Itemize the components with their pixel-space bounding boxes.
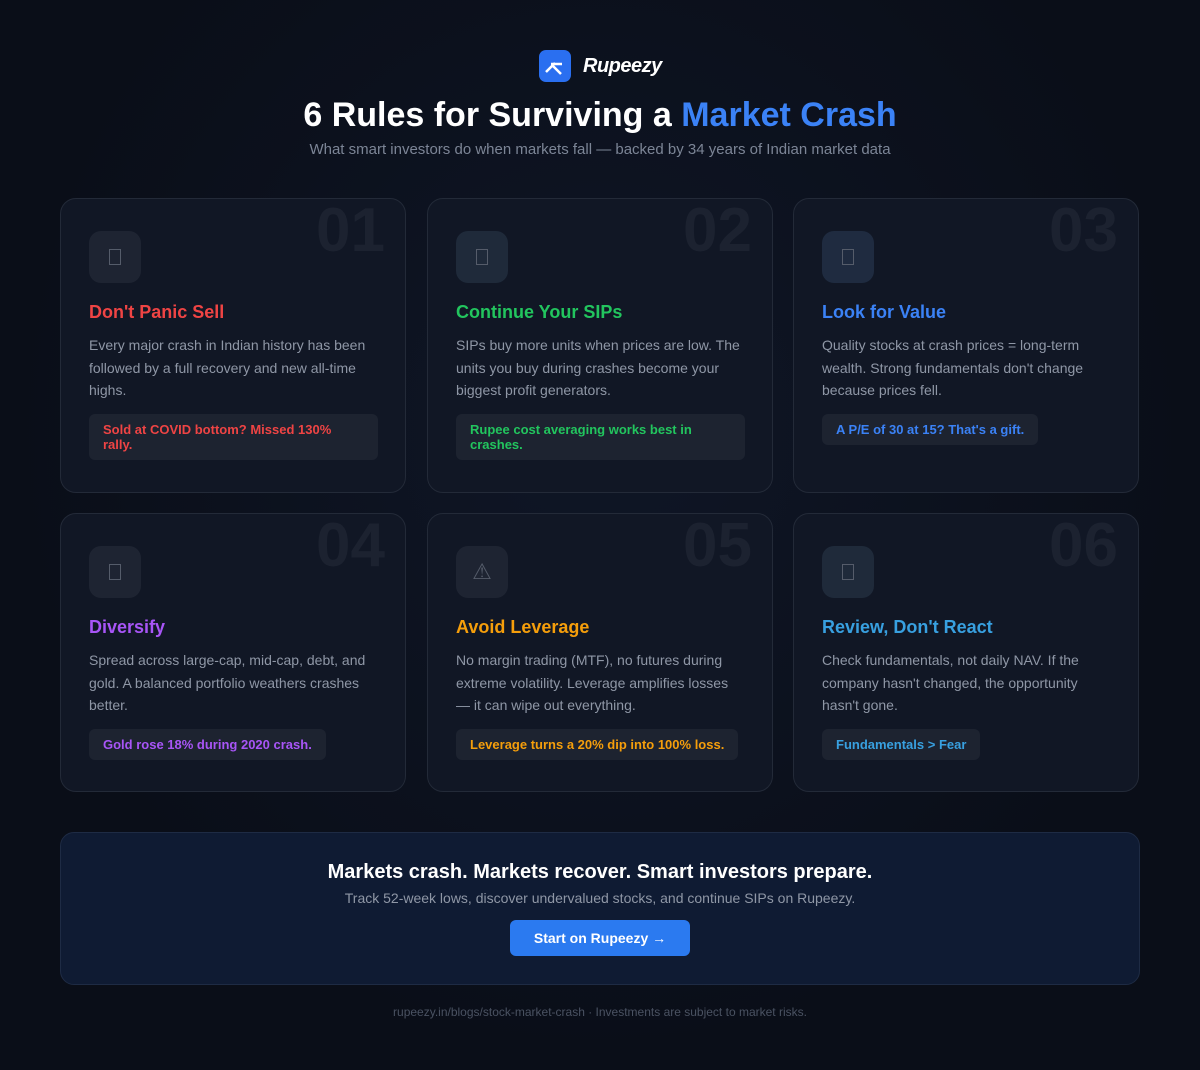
- panel: rule 04: Diversify: [89, 617, 165, 637]
- icon: 02: [456, 231, 508, 283]
- title: 6 Rules for Surviving a Market Crash: [303, 96, 897, 134]
- panel: rule 01: Don't Panic Sell: [89, 302, 224, 322]
- button: Start on Rupeezy →: [534, 930, 666, 946]
- panel: rule 02: 02: [683, 196, 752, 265]
- icon: 01: [89, 231, 141, 283]
- panel: rule 06: 06: [1049, 511, 1118, 580]
- logo: Rupeezy: [583, 54, 662, 76]
- icon: warning: ⚠: [472, 559, 492, 584]
- panel: rule 03: [793, 198, 1139, 493]
- icon: 06: [822, 546, 874, 598]
- panel: rule 04: 04: [316, 511, 385, 580]
- panel: rule 02: [427, 198, 773, 493]
- panel: rule 05: [427, 513, 773, 792]
- panel: rule 05: Avoid Leverage: [456, 617, 589, 637]
- panel: rule 06: Review, Don't React: [822, 617, 993, 637]
- panel: rule 05: Leverage turns a 20% dip into 100% loss.: [470, 736, 724, 752]
- panel: rule 02: Rupee cost averaging works best in crashes.: [470, 422, 692, 452]
- panel: rule 04: Spread across large-cap, mid-cap, debt, and gold. A balanced portfolio weathers crashes better.: [89, 652, 365, 713]
- icon: warning: [456, 546, 508, 598]
- panel: rule 06: [793, 513, 1139, 792]
- panel: rule 03: 03: [1049, 196, 1118, 265]
- panel: rule 05: No margin trading (MTF), no futures during extreme volatility. Leverage amplifies losses — it can wipe out everything.: [456, 652, 728, 713]
- subtitle: What smart investors do when markets fall — backed by 34 years of Indian market data: [309, 141, 891, 158]
- panel: rule 04: Gold rose 18% during 2020 crash.: [103, 736, 312, 752]
- footer: rupeezy.in/blogs/stock-market-crash · Investments are subject to market risks.: [393, 1005, 807, 1019]
- panel: rule 03: Look for Value: [822, 302, 946, 322]
- panel: rule 05: 05: [683, 511, 752, 580]
- icon: 03: [822, 231, 874, 283]
- panel: rule 01: Sold at COVID bottom? Missed 130% rally.: [103, 422, 331, 452]
- panel: rule 01: Every major crash in Indian history has been followed by a full recovery and new all-time highs.: [89, 337, 365, 398]
- panel: rule 02: Continue Your SIPs: [456, 302, 622, 322]
- logo: [539, 50, 663, 82]
- panel: rule 03: Quality stocks at crash prices = long-term wealth. Strong fundamentals don't change because prices fell.: [822, 337, 1083, 398]
- callout: CTA: Markets crash. Markets recover. Smart investors prepare.: [328, 861, 872, 883]
- panel: rule 02: SIPs buy more units when prices are low. The units you buy during crashes become your biggest profit generators.: [456, 337, 740, 398]
- callout: CTA: Track 52-week lows, discover undervalued stocks, and continue SIPs on Rupeezy.: [345, 890, 855, 906]
- panel: rule 06: Fundamentals > Fear: [836, 736, 966, 752]
- icon: 04: [89, 546, 141, 598]
- button: [510, 920, 690, 956]
- panel: rule 01: [60, 198, 406, 493]
- panel: rule 06: Check fundamentals, not daily NAV. If the company hasn't changed, the opportunity hasn't gone.: [822, 652, 1079, 713]
- panel: rule 03: A P/E of 30 at 15? That's a gift.: [836, 422, 1024, 436]
- panel: rule 01: 01: [316, 196, 385, 265]
- panel: rule 04: [60, 513, 406, 792]
- callout: CTA: [60, 832, 1140, 985]
